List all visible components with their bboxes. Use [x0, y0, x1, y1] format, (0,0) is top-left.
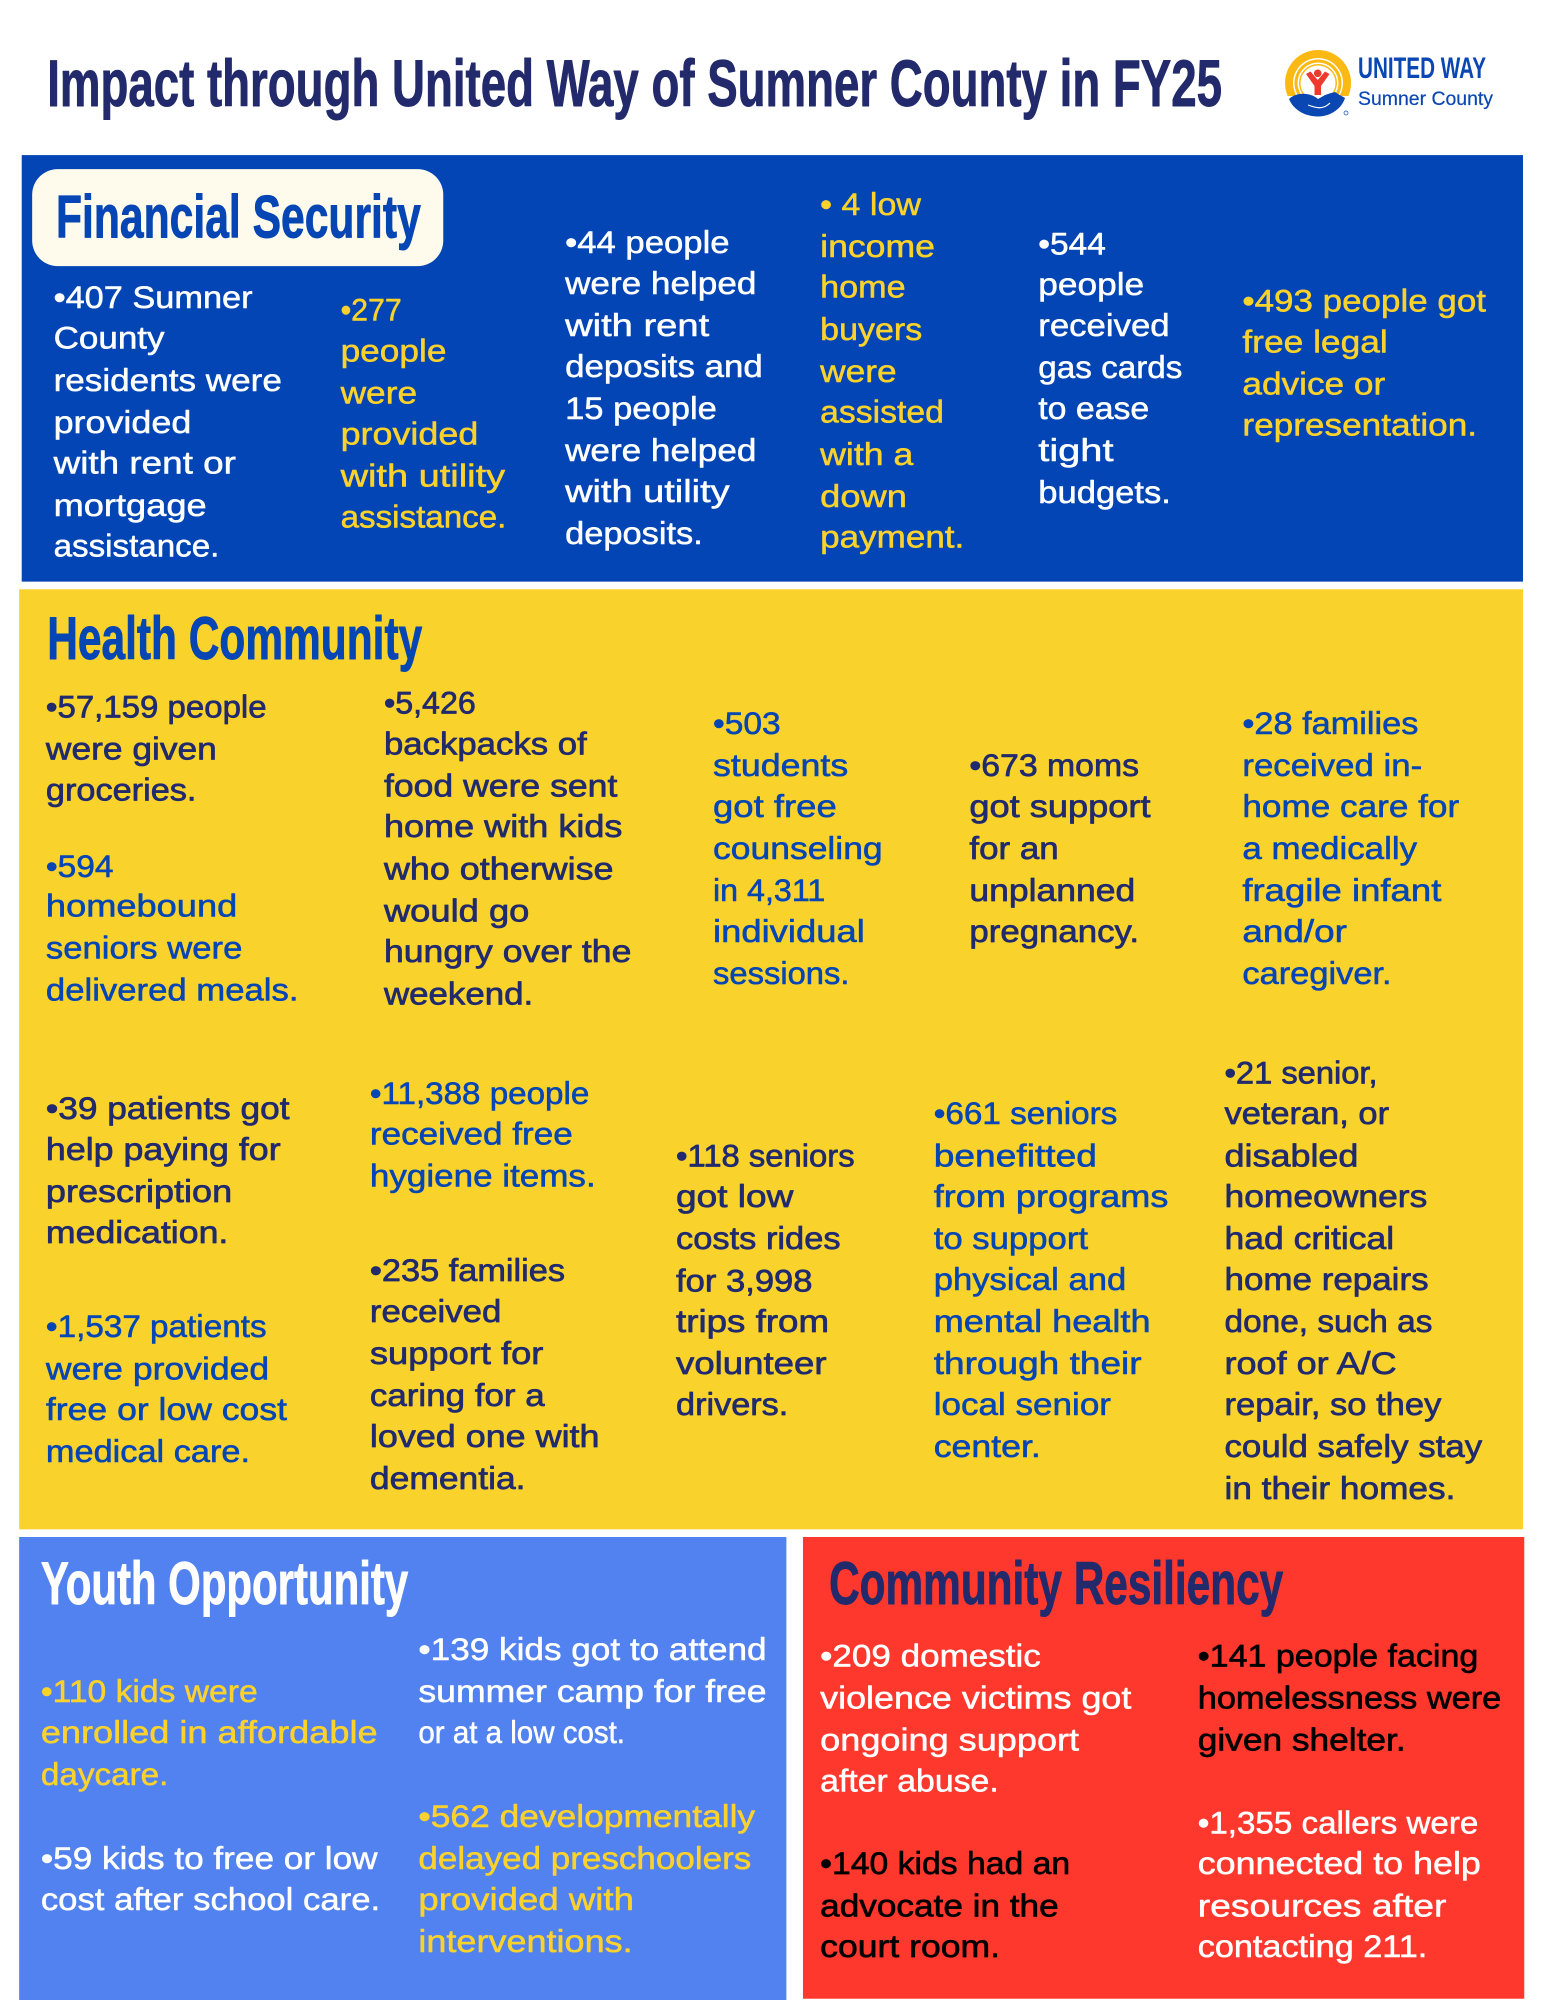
- text: 277 utility assistance: •277: [341, 293, 402, 328]
- text: 544 gas cards: to ease: [1038, 391, 1149, 426]
- text: 57,159 groceries: •57,159 people: [46, 689, 267, 724]
- text: 21 home repairs: •21 senior,: [1225, 1055, 1378, 1090]
- text: 21 home repairs: done, such as: [1225, 1304, 1432, 1339]
- text: 28 families in-home care: fragile infant: [1242, 873, 1442, 908]
- text: 4 home buyers: buyers: [820, 312, 922, 347]
- text: 493 legal advice: free legal: [1242, 325, 1388, 360]
- text: 11,388 hygiene items: hygiene items.: [370, 1159, 596, 1194]
- text: 4 home buyers: home: [820, 270, 906, 305]
- text: 673 moms: •673 moms: [969, 748, 1139, 783]
- text: 140 kids advocate: •140 kids had an: [820, 1846, 1070, 1881]
- text: 673 moms: got support: [969, 789, 1151, 824]
- text: 544 gas cards: budgets.: [1038, 475, 1171, 510]
- text: 407 residents rent assistance: County: [54, 321, 165, 356]
- text: 39 patients prescription: help paying for: [46, 1132, 281, 1167]
- text: 493 legal advice: representation.: [1242, 407, 1477, 442]
- text: 594 homebound seniors: •594: [46, 849, 114, 884]
- text: 277 utility assistance: [339, 293, 506, 534]
- text: 209 domestic violence: violence victims got: [820, 1680, 1132, 1715]
- text: 503 students counseling: individual: [713, 914, 865, 949]
- text: 59 kids after school care: •59 kids to free or low: [41, 1841, 378, 1876]
- panel background: [19, 1537, 786, 2000]
- text: 118 seniors rides: [676, 1138, 855, 1422]
- text: 21 home repairs: disabled: [1225, 1138, 1358, 1173]
- text: 277 utility assistance: were: [339, 376, 417, 411]
- text: 57,159 groceries: [45, 689, 267, 807]
- logo: United Way Sumner County: [1284, 50, 1494, 120]
- text: 209 domestic violence: •209 domestic: [820, 1638, 1041, 1673]
- text: 407 residents rent assistance: with rent or: [52, 446, 236, 481]
- text: 277 utility assistance: assistance.: [341, 499, 506, 534]
- text: 209 domestic violence: after abuse.: [820, 1763, 999, 1798]
- text: 209 domestic violence: [820, 1638, 1132, 1798]
- text: 140 kids advocate: [820, 1846, 1070, 1964]
- text: 562 preschoolers: •562 developmentally: [418, 1799, 755, 1834]
- text: 11,388 hygiene items: •11,388 people: [370, 1076, 589, 1111]
- text: 594 homebound seniors: homebound: [46, 888, 237, 923]
- text: 28 families in-home care: received in-: [1242, 748, 1422, 783]
- text: 59 kids after school care: [41, 1841, 380, 1917]
- text: 21 home repairs: could safely stay: [1225, 1429, 1483, 1464]
- text: 407 residents rent assistance: mortgage: [54, 488, 207, 523]
- text: 28 families in-home care: a medically: [1242, 831, 1417, 866]
- icon: United Way sun, person and hand: [1284, 50, 1352, 120]
- text: 21 home repairs: roof or A/C: [1225, 1346, 1397, 1381]
- text: 503 students counseling: counseling: [713, 831, 883, 866]
- text: 118 seniors rides: got low: [676, 1179, 794, 1214]
- text: 1,537 patients medical care: were provided: [45, 1351, 269, 1386]
- text: 110 kids daycare: daycare.: [41, 1757, 168, 1792]
- text: 44 rent deposits and 15 utility deposits: with utility: [564, 474, 730, 509]
- text: 1,537 patients medical care: medical care.: [46, 1434, 250, 1469]
- text: 21 home repairs: in their homes.: [1225, 1471, 1455, 1506]
- text: 44 rent deposits and 15 utility deposits: deposits.: [565, 516, 703, 551]
- text: 594 homebound seniors: delivered meals.: [46, 973, 298, 1008]
- text: 503 students counseling: got free: [713, 789, 837, 824]
- text: 4 home buyers: were: [819, 354, 897, 389]
- text: 21 home repairs: [1225, 1055, 1483, 1506]
- text: 4 home buyers: income: [820, 229, 935, 264]
- text: 503 students counseling: •503: [713, 706, 781, 741]
- text: 21 home repairs: veteran, or: [1225, 1096, 1389, 1131]
- text: 4 home buyers: down: [820, 479, 907, 514]
- text: 39 patients prescription: medication.: [46, 1215, 228, 1250]
- text: 544 gas cards: received: [1038, 308, 1170, 343]
- panel: financial security: [22, 155, 1523, 582]
- text: 407 residents rent assistance: residents were: [54, 363, 282, 398]
- text: 4 home buyers: • 4 low: [820, 187, 921, 222]
- text: 139 kids summer camp: summer camp for free: [418, 1674, 767, 1709]
- text: 4 home buyers: assisted: [820, 395, 944, 430]
- text: 544 gas cards: •544: [1038, 226, 1106, 261]
- text: 1,355 callers 211: resources after: [1198, 1888, 1446, 1923]
- text: 141 people shelter: homelessness were: [1198, 1680, 1501, 1715]
- text: 493 legal advice: advice or: [1242, 367, 1385, 402]
- text: 28 families in-home care: and/or: [1242, 914, 1347, 949]
- text: 5,426 backpacks: •5,426: [384, 686, 476, 721]
- text: 140 kids advocate: court room.: [820, 1929, 1000, 1964]
- text: 1,537 patients medical care: [45, 1309, 287, 1469]
- panel background: [803, 1537, 1524, 1999]
- heading: health community: Health Community: [47, 605, 423, 672]
- text: 493 legal advice: •493 people got: [1242, 284, 1486, 319]
- text: 5,426 backpacks: would go: [383, 893, 529, 928]
- text: 235 families dementia: •235 families: [370, 1253, 565, 1288]
- text: 235 families dementia: [370, 1253, 600, 1496]
- text: 407 residents rent assistance: •407 Sumner: [54, 280, 253, 315]
- text: 118 seniors rides: •118 seniors: [676, 1138, 855, 1173]
- text: 141 people shelter: given shelter.: [1198, 1723, 1406, 1758]
- logo subtitle: Sumner County: [1358, 89, 1494, 110]
- text: 57,159 groceries: groceries.: [46, 772, 196, 807]
- text: 5,426 backpacks: [383, 686, 631, 1011]
- text: 277 utility assistance: provided: [341, 416, 478, 451]
- text: 562 preschoolers: provided with: [418, 1882, 634, 1917]
- logo wordmark: UNITED WAY: [1358, 52, 1486, 85]
- text: 235 families dementia: loved one with: [370, 1419, 600, 1454]
- text: 5,426 backpacks: food were sent: [384, 768, 618, 803]
- text: 562 preschoolers: [418, 1799, 755, 1959]
- text: 44 rent deposits and 15 utility deposits: [564, 225, 763, 551]
- text: 4 home buyers: with a: [819, 437, 914, 472]
- text: 544 gas cards: gas cards: [1038, 350, 1182, 385]
- text: 21 home repairs: home repairs: [1225, 1262, 1429, 1297]
- text: 5,426 backpacks: weekend.: [383, 976, 533, 1011]
- text: 562 preschoolers: interventions.: [418, 1924, 633, 1959]
- text: 118 seniors rides: trips from: [676, 1304, 829, 1339]
- text: 209 domestic violence: ongoing support: [820, 1723, 1079, 1758]
- text: 118 seniors rides: drivers.: [676, 1387, 788, 1422]
- text: 661 seniors senior center: mental health: [934, 1304, 1151, 1339]
- panel background: [22, 155, 1523, 582]
- text: 503 students counseling: students: [713, 748, 848, 783]
- text: 544 gas cards: [1038, 226, 1182, 510]
- text: 118 seniors rides: costs rides: [676, 1221, 841, 1256]
- text: 673 moms: [969, 748, 1151, 949]
- text: 139 kids summer camp: [418, 1632, 767, 1750]
- text: 44 rent deposits and 15 utility deposits: were helped: [564, 433, 756, 468]
- text: 594 homebound seniors: seniors were: [46, 930, 242, 965]
- text: 235 families dementia: received: [370, 1294, 501, 1329]
- text: 118 seniors rides: volunteer: [676, 1346, 827, 1381]
- text: 28 families in-home care: [1242, 706, 1459, 991]
- text: 235 families dementia: caring for a: [370, 1378, 545, 1413]
- text: 493 legal advice: [1242, 284, 1486, 442]
- text: 118 seniors rides: for 3,998: [676, 1263, 813, 1298]
- text: 661 seniors senior center: center.: [934, 1429, 1041, 1464]
- text: 4 home buyers: [819, 187, 964, 555]
- text: 661 seniors senior center: local senior: [934, 1387, 1111, 1422]
- text: 21 home repairs: had critical: [1225, 1221, 1394, 1256]
- heading: community resiliency: Community Resiliency: [829, 1550, 1284, 1617]
- text: 139 kids summer camp: •139 kids got to attend: [418, 1632, 767, 1667]
- panel: youth opportunity: [19, 1537, 786, 2000]
- text: 673 moms: for an: [969, 831, 1059, 866]
- text: 140 kids advocate: advocate in the: [820, 1888, 1059, 1923]
- text: 44 rent deposits and 15 utility deposits: with rent: [564, 308, 710, 343]
- panel background: [19, 589, 1523, 1529]
- text: 110 kids daycare: •110 kids were: [41, 1674, 258, 1709]
- text: 661 seniors senior center: from programs: [934, 1179, 1168, 1214]
- text: 5,426 backpacks: home with kids: [384, 809, 622, 844]
- panel: community resiliency: [803, 1537, 1524, 1999]
- text: 562 preschoolers: delayed preschoolers: [418, 1841, 751, 1876]
- panel: health community: [19, 589, 1523, 1529]
- text: 661 seniors senior center: physical and: [934, 1262, 1126, 1297]
- text: 59 kids after school care: cost after school care.: [41, 1882, 380, 1917]
- text: 141 people shelter: •141 people facing: [1198, 1638, 1478, 1673]
- heading pill: Financial Security: [56, 183, 421, 250]
- text: 5,426 backpacks: hungry over the: [384, 934, 631, 969]
- text: 57,159 groceries: were given: [45, 731, 217, 766]
- text: 407 residents rent assistance: [52, 280, 282, 564]
- text: 110 kids daycare: enrolled in affordable: [41, 1715, 378, 1750]
- text: 277 utility assistance: with utility: [339, 458, 505, 493]
- text: 39 patients prescription: prescription: [46, 1174, 232, 1209]
- text: 503 students counseling: [713, 706, 883, 991]
- text: 503 students counseling: sessions.: [713, 956, 850, 991]
- text: 407 residents rent assistance: provided: [54, 405, 191, 440]
- text: 5,426 backpacks: backpacks of: [384, 726, 587, 761]
- text: 661 seniors senior center: through their: [934, 1346, 1142, 1381]
- text: 28 families in-home care: caregiver.: [1242, 956, 1392, 991]
- text: 1,355 callers 211: [1198, 1805, 1481, 1964]
- text: 661 seniors senior center: to support: [934, 1221, 1088, 1256]
- text: 673 moms: unplanned: [969, 873, 1135, 908]
- text: 28 families in-home care: •28 families: [1242, 706, 1418, 741]
- text: 141 people shelter: [1198, 1638, 1501, 1758]
- text: 544 gas cards: people: [1038, 267, 1144, 302]
- heading: youth opportunity: Youth Opportunity: [41, 1550, 409, 1617]
- text: 44 rent deposits and 15 utility deposits: deposits and: [565, 349, 763, 384]
- text: 1,537 patients medical care: free or low cost: [46, 1392, 287, 1427]
- text: 4 home buyers: payment.: [820, 520, 964, 555]
- text: 1,355 callers 211: contacting 211.: [1198, 1929, 1427, 1964]
- text: 28 families in-home care: home care for: [1242, 789, 1459, 824]
- text: 594 homebound seniors: [46, 849, 298, 1008]
- text: 21 home repairs: homeowners: [1225, 1179, 1427, 1214]
- text: 39 patients prescription: [46, 1091, 290, 1250]
- text: 407 residents rent assistance: assistance.: [54, 529, 219, 564]
- text: 544 gas cards: tight: [1038, 433, 1114, 468]
- text: 235 families dementia: dementia.: [370, 1461, 526, 1496]
- text: 1,355 callers 211: •1,355 callers were: [1198, 1805, 1478, 1840]
- text: 661 seniors senior center: [934, 1096, 1168, 1464]
- text: 39 patients prescription: •39 patients got: [46, 1091, 290, 1126]
- text: 139 kids summer camp: or at a low cost.: [418, 1715, 625, 1750]
- text: 1,537 patients medical care: •1,537 patients: [46, 1309, 267, 1344]
- text: 661 seniors senior center: •661 seniors: [934, 1096, 1117, 1131]
- text: 503 students counseling: in 4,311: [713, 873, 825, 908]
- text: 44 rent deposits and 15 utility deposits: •44 people: [565, 225, 730, 260]
- text: 277 utility assistance: people: [341, 333, 446, 368]
- text: 44 rent deposits and 15 utility deposits: 15 people: [565, 391, 717, 426]
- text: 673 moms: pregnancy.: [969, 914, 1139, 949]
- text: 1,355 callers 211: connected to help: [1198, 1846, 1481, 1881]
- text: 11,388 hygiene items: received free: [370, 1117, 573, 1152]
- text: 21 home repairs: repair, so they: [1225, 1387, 1442, 1422]
- text: 11,388 hygiene items: [370, 1076, 596, 1194]
- text: 235 families dementia: support for: [370, 1336, 543, 1371]
- heading pill: [32, 169, 443, 266]
- text: 44 rent deposits and 15 utility deposits: were helped: [564, 266, 756, 301]
- text: 661 seniors senior center: benefitted: [934, 1138, 1097, 1173]
- text: 110 kids daycare: [41, 1674, 378, 1792]
- text: 5,426 backpacks: who otherwise: [383, 851, 614, 886]
